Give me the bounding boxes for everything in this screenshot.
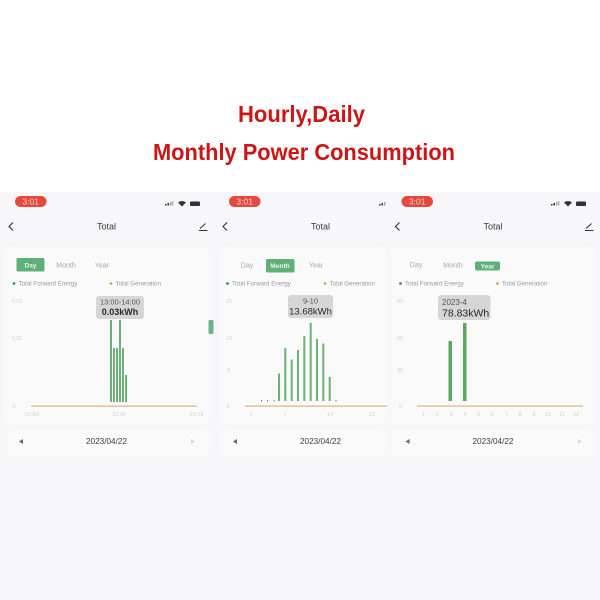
- status icons: [551, 201, 586, 206]
- x axis labels: 6: [491, 412, 494, 418]
- y axis labels: [12, 299, 22, 410]
- x axis labels: 9: [532, 412, 536, 418]
- tab: Year: Year: [95, 262, 110, 270]
- x axis labels: [249, 412, 375, 418]
- status time pill: [402, 196, 433, 207]
- y axis labels: 0.02: [12, 336, 22, 342]
- legend: total forward energy: Total Forward Energy: [18, 280, 78, 288]
- edit icon: [199, 224, 208, 230]
- x axis labels: 3: [449, 412, 453, 418]
- bar chart: hourly: [110, 320, 127, 402]
- tooltip: [438, 295, 490, 320]
- tab: Day: Day: [410, 262, 423, 269]
- y axis labels: 5: [227, 368, 231, 374]
- date: 2023/04/22: [473, 437, 514, 446]
- screen title: Total: [311, 222, 330, 232]
- date: 2023/04/22: [300, 437, 341, 446]
- panel: monthly phone screen: [391, 196, 596, 456]
- status time pill: [229, 196, 260, 207]
- next arrow: [578, 439, 582, 444]
- tooltip: 9-10: [303, 296, 318, 306]
- x axis labels: 12: [573, 412, 579, 418]
- next arrow: [191, 439, 195, 444]
- x axis labels: [25, 412, 203, 418]
- y axis labels: 90: [397, 299, 403, 305]
- x axis labels: 2: [436, 412, 439, 418]
- y axis labels: 0.03: [12, 299, 22, 305]
- tooltip: [288, 295, 333, 318]
- legend: total generation: Total Generation: [116, 280, 161, 288]
- y axis labels: 60: [397, 336, 403, 342]
- date card: [391, 428, 596, 456]
- tab: Day active: [16, 258, 44, 272]
- status time pill: 3:01: [236, 196, 253, 206]
- back arrow: [223, 222, 227, 230]
- x axis labels: 10: [545, 412, 551, 418]
- x axis labels: 1: [249, 412, 253, 418]
- x axis labels: 22: [369, 412, 375, 418]
- status time pill: 3:01: [409, 196, 426, 206]
- bar chart: monthly: [448, 323, 466, 401]
- x axis labels: 14: [327, 412, 333, 418]
- x axis labels: 7: [283, 412, 287, 418]
- status time pill: [15, 196, 46, 207]
- panel: hourly phone screen: [3, 196, 214, 456]
- y axis labels: 10: [226, 336, 232, 342]
- x axis labels: [422, 412, 579, 418]
- edit icon: [585, 224, 594, 230]
- x axis labels: 5: [477, 412, 480, 418]
- y axis labels: 15: [226, 299, 232, 305]
- baseline: [245, 406, 387, 407]
- title: Hourly,Daily: [238, 101, 365, 127]
- tab: Day: Day: [241, 262, 254, 270]
- tab: Year: Year: [309, 262, 324, 270]
- tab: Month: Month: [56, 262, 76, 270]
- date: 2023/04/22: [86, 437, 127, 446]
- tooltip: 0.03kWh: [102, 307, 138, 317]
- title: [153, 101, 455, 165]
- y axis labels: 30: [397, 368, 403, 374]
- tooltip: 78.83kWh: [442, 308, 489, 320]
- legend: total forward energy: Total Forward Energy: [405, 280, 465, 288]
- tooltip: 13.68kWh: [289, 306, 332, 318]
- legend: total generation: Total Generation: [502, 280, 548, 288]
- x axis labels: 00:00: [25, 412, 38, 418]
- previous arrow: [233, 439, 237, 444]
- y axis labels: [397, 299, 403, 410]
- y axis labels: [226, 299, 232, 410]
- back arrow: [9, 222, 13, 230]
- x axis labels: 11: [559, 412, 565, 418]
- tab: Year active: Year: [481, 264, 495, 270]
- date card: [219, 428, 387, 456]
- previous arrow: [406, 439, 410, 444]
- scroll handle: [208, 320, 214, 334]
- status time pill: 3:01: [22, 196, 39, 206]
- baseline: [31, 406, 197, 407]
- screen title: Total: [483, 222, 503, 232]
- status icons: [165, 201, 200, 206]
- tab: Day active: Day: [25, 262, 37, 270]
- tab: Month: Month: [443, 262, 463, 270]
- status icons: [379, 202, 386, 206]
- y axis labels: 0: [12, 404, 16, 410]
- x axis labels: 1: [422, 412, 425, 418]
- previous arrow: [19, 439, 23, 444]
- x axis labels: 4: [463, 412, 467, 418]
- x axis labels: 12:00: [112, 412, 126, 418]
- tab: Month active: Month: [270, 263, 290, 270]
- x axis labels: 23:59: [190, 412, 203, 418]
- tooltip: [96, 296, 144, 319]
- x axis labels: 7: [505, 412, 508, 418]
- tab: Year active: [475, 262, 500, 270]
- panel: daily phone screen: [219, 196, 387, 456]
- bar chart: daily: [261, 323, 336, 402]
- screen title: Total: [97, 222, 116, 232]
- legend: total forward energy: Total Forward Energy: [232, 280, 292, 288]
- y axis labels: 0: [399, 404, 402, 410]
- chart card: [391, 247, 596, 425]
- chart card: [219, 247, 387, 425]
- date card: [8, 428, 210, 456]
- chart card: [3, 247, 210, 425]
- y axis labels: 0: [226, 404, 230, 410]
- tooltip: 2023-4: [442, 298, 467, 307]
- tab: Month active: [266, 259, 294, 272]
- baseline: [417, 406, 583, 407]
- title: Monthly Power Consumption: [153, 139, 455, 165]
- tooltip: 13:00-14:00: [100, 298, 140, 306]
- x axis labels: 8: [518, 412, 522, 418]
- legend: total generation: Total Generation: [330, 280, 375, 288]
- back arrow: [396, 222, 400, 230]
